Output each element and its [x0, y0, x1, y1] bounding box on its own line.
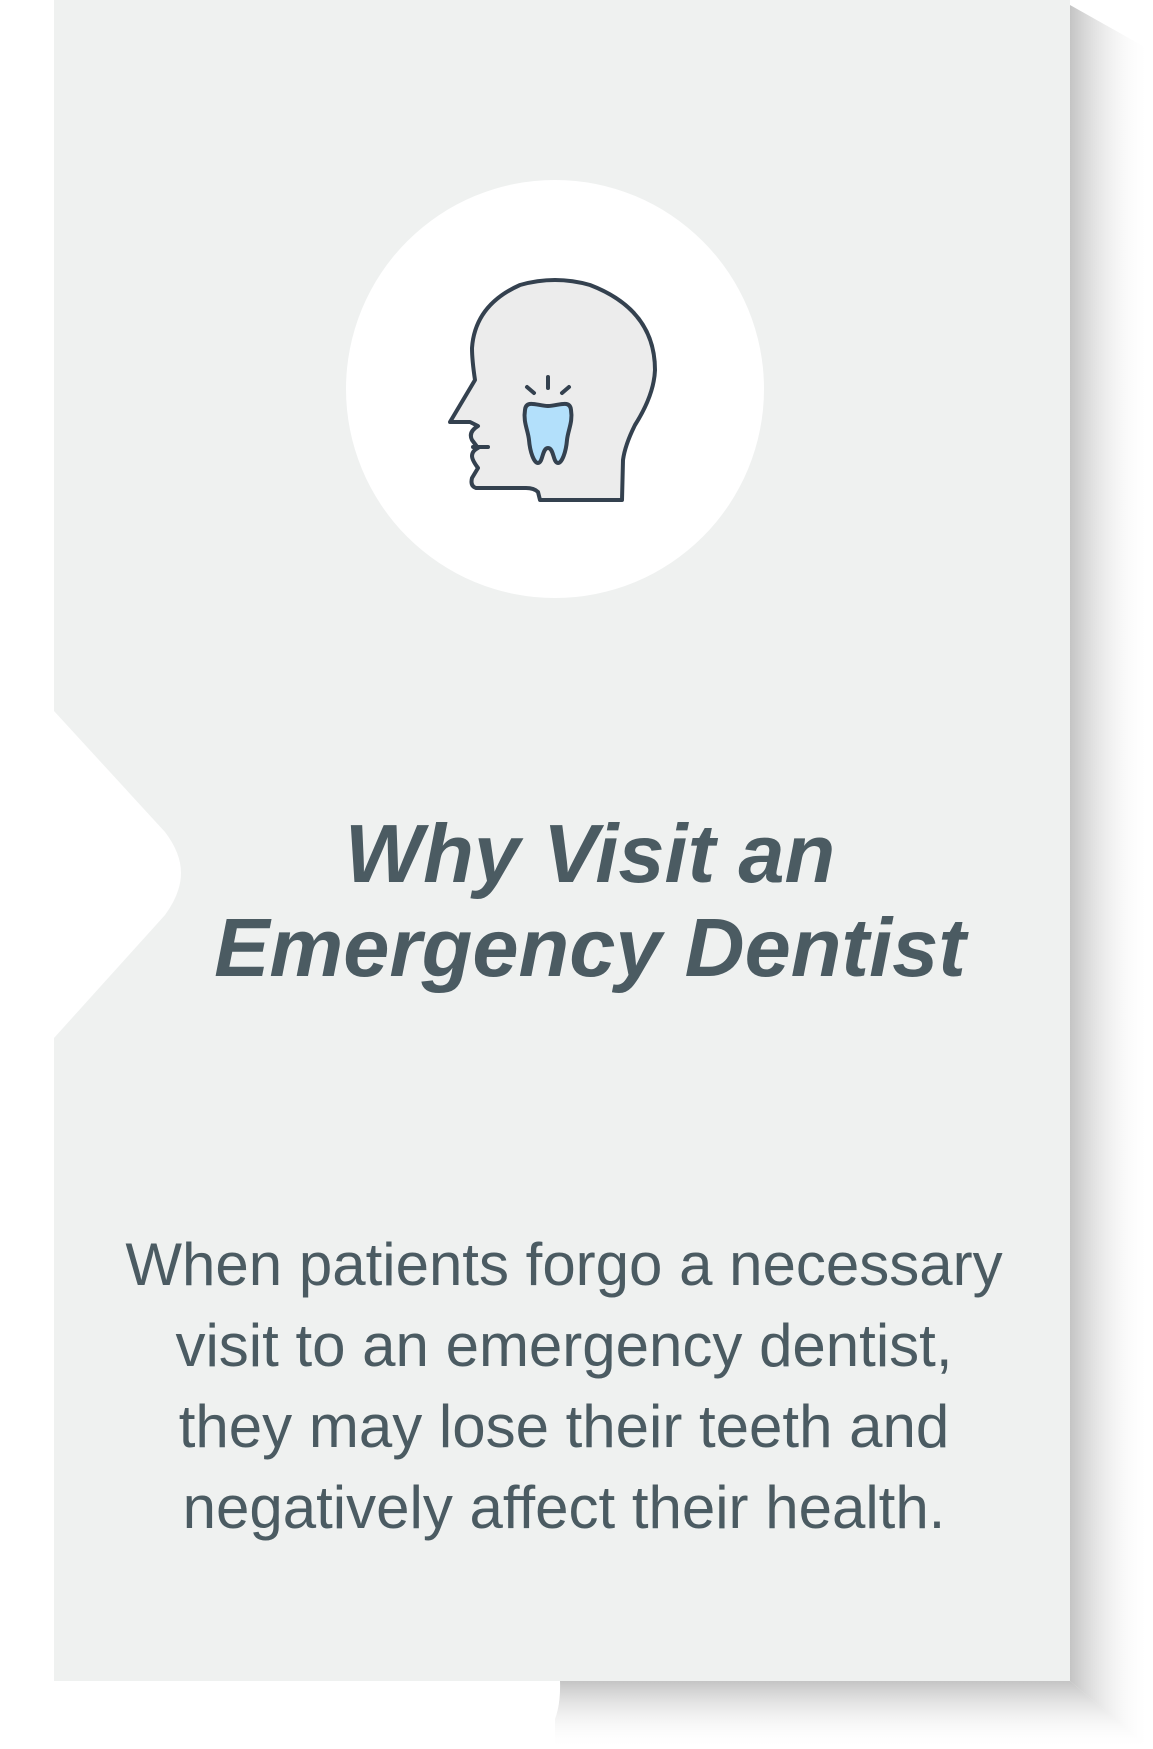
- icon: head with tooth: [448, 278, 657, 502]
- title: Emergency Dentist: [214, 901, 966, 994]
- body text: [125, 1231, 1003, 1541]
- body text: negatively affect their health.: [183, 1474, 945, 1541]
- body text: When patients forgo a necessary: [125, 1231, 1003, 1298]
- body text: they may lose their teeth and: [179, 1393, 949, 1460]
- body text: visit to an emergency dentist,: [175, 1312, 953, 1379]
- title: Why Visit an: [345, 807, 835, 900]
- icon circle: [346, 180, 764, 598]
- title: [214, 807, 969, 994]
